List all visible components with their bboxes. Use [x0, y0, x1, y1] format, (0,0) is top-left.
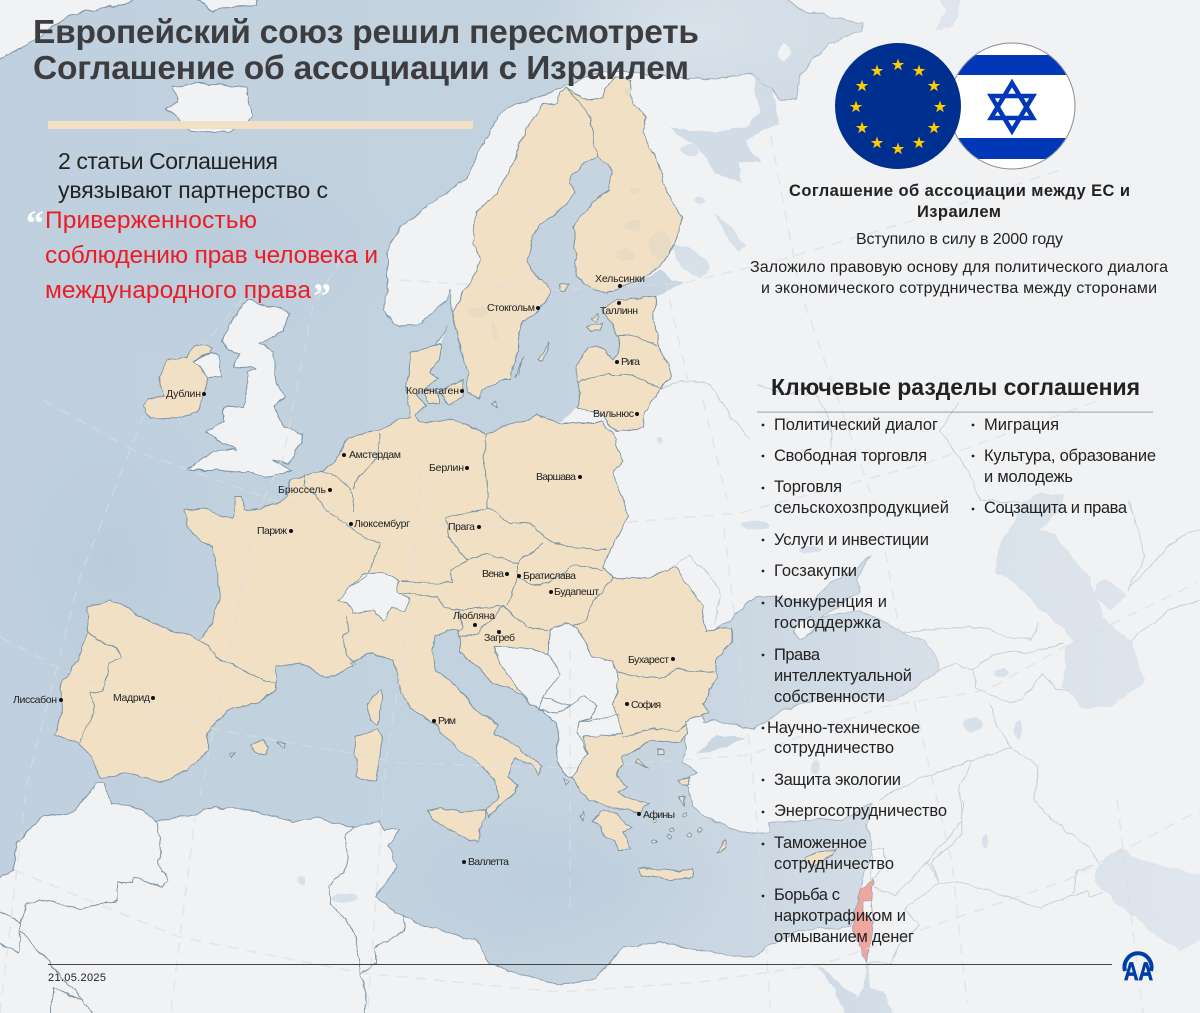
key sections list: column 1: Борьба с	[774, 886, 840, 904]
city names: Мадрид	[113, 692, 150, 704]
baltic states	[577, 297, 671, 433]
key sections list: column 1: Торговля	[774, 478, 842, 496]
lakes	[298, 145, 1022, 903]
key sections list: column 1: сотрудничество	[774, 739, 894, 757]
switzerland	[337, 573, 410, 620]
west bank	[863, 900, 873, 923]
intro text: 2 статьи Соглашения	[58, 148, 278, 174]
kolguev island	[778, 44, 790, 60]
list bullets	[762, 424, 764, 897]
iceland	[167, 83, 252, 133]
agreement details: и экономического сотрудничества между сторонами	[761, 280, 1157, 297]
city names: Брюссель	[278, 484, 327, 496]
western balkans non-EU	[495, 623, 622, 778]
key sections list: column 1: Энергосотрудничество	[774, 802, 947, 820]
africa borders	[0, 822, 404, 1013]
key sections list: column 1: сотрудничество	[774, 855, 894, 873]
sicily	[428, 808, 487, 843]
agreement heading: Израилем	[917, 203, 1001, 221]
ireland	[143, 345, 212, 420]
cyprus	[805, 850, 837, 867]
city names: Берлин	[429, 462, 464, 474]
aegean and baltic islands	[491, 284, 727, 852]
city names: Амстердам	[349, 449, 401, 461]
red quote: Приверженностью	[45, 207, 257, 234]
city names: Будапешт	[554, 586, 599, 598]
key sections list: column 2: Миграция	[984, 416, 1059, 434]
pale sea top right	[933, 0, 960, 30]
column 2 bullets	[972, 424, 974, 510]
svalbard coast	[180, 0, 258, 12]
black sea	[700, 555, 939, 728]
national borders inside EU	[80, 335, 715, 753]
title: Соглашение об ассоциации с Израилем	[33, 50, 689, 87]
key sections list: column 1: Защита экологии	[774, 771, 901, 789]
agreement description	[750, 182, 1168, 297]
key sections list: column 2	[972, 416, 1156, 517]
key sections list: column 1	[762, 416, 949, 946]
key sections list: column 1: господдержка	[774, 614, 882, 632]
flag: European Union	[835, 43, 961, 169]
key sections list: column 1: Госзакупки	[774, 562, 857, 580]
white quotation marks: ”	[313, 276, 331, 316]
sweden	[453, 88, 598, 398]
key sections list: column 1: Свободная торговля	[774, 447, 927, 465]
city names: Любляна	[453, 610, 495, 622]
white quotation marks: “	[26, 203, 44, 243]
title: Европейский союз решил пересмотреть	[33, 14, 699, 51]
city names: Рига	[621, 356, 640, 368]
danish islands	[440, 380, 463, 405]
crete	[638, 868, 692, 880]
persian gulf	[1093, 847, 1200, 950]
city names: Лиссабон	[13, 694, 57, 706]
city names: Бухарест	[628, 654, 669, 666]
key sections heading: Ключевые разделы соглашения	[771, 374, 1140, 400]
city dots	[59, 284, 675, 864]
EU member states	[55, 78, 837, 880]
intro text	[58, 148, 328, 203]
city names: Прага	[448, 521, 475, 533]
balearic islands	[230, 740, 285, 757]
aral sea	[1094, 578, 1127, 610]
intro text: увязывают партнерство с	[58, 177, 328, 203]
lebanon	[870, 848, 885, 880]
northern ireland	[192, 352, 222, 378]
city names: Валлетта	[468, 856, 509, 868]
agreement details: Заложило правовую основу для политического диалога	[750, 259, 1168, 276]
date: 21.05.2025	[48, 972, 106, 984]
logo: Anadolu Agency: AA	[1124, 958, 1153, 986]
greenland coast	[0, 0, 177, 68]
sea shading	[0, 0, 870, 970]
city names: Вена	[482, 568, 504, 580]
key sections list: column 1: Конкуренция и	[774, 593, 887, 611]
flag: Israel	[945, 43, 1080, 169]
city names: Рим	[438, 715, 456, 727]
city names: Варшава	[536, 471, 576, 483]
red sea and suez	[818, 963, 900, 1013]
city names: Афины	[643, 809, 675, 821]
city names: Вильнюс	[593, 408, 634, 420]
key sections list: column 2: Соцзащита и права	[984, 499, 1128, 517]
funen	[425, 390, 438, 403]
EU mainland	[55, 343, 731, 817]
city names: Люксембург	[354, 518, 410, 530]
key sections list: column 2: и молодежь	[984, 468, 1073, 486]
agreement details: Вступило в силу в 2000 году	[856, 231, 1063, 248]
sea of marmara	[696, 735, 746, 753]
agreement heading: Соглашение об ассоциации между ЕС и	[789, 182, 1130, 200]
key sections list: column 1: Научно-техническое	[767, 719, 920, 737]
crimea	[792, 618, 818, 640]
city names: Таллинн	[600, 305, 638, 317]
peloponnese	[592, 810, 632, 850]
israel and palestine highlight	[852, 848, 885, 962]
heading rule	[757, 412, 1153, 413]
footer rule	[48, 964, 1112, 965]
city names: Хельсинки	[595, 273, 645, 285]
caspian sea	[996, 493, 1145, 708]
red quote	[45, 207, 378, 304]
agreement heading	[789, 182, 1130, 221]
agreement details	[750, 231, 1168, 297]
red quote: международного права	[45, 277, 311, 304]
key sections list: column 1: собственности	[774, 688, 885, 706]
key sections list: column 1: Политический диалог	[774, 416, 938, 434]
key sections list: column 1: Права	[774, 646, 821, 664]
city names: Копенгаген	[406, 385, 459, 397]
city names: Братислава	[523, 570, 576, 582]
corsica	[367, 690, 383, 725]
white sea	[669, 75, 780, 183]
tan inland shading	[467, 87, 671, 339]
key sections list: column 1: интеллектуальной	[774, 667, 912, 685]
key sections list: column 1: наркотрафиком и	[774, 907, 906, 925]
city names	[13, 273, 675, 868]
city names: Загреб	[484, 632, 515, 644]
city names: Стокгольм	[487, 302, 535, 314]
finland	[567, 78, 683, 292]
red quote: соблюдению прав человека и	[45, 242, 378, 269]
united kingdom	[187, 300, 302, 478]
sardinia	[355, 730, 382, 782]
baltic sea	[420, 155, 684, 440]
key sections list: column 1: отмыванием денег	[774, 928, 914, 946]
key sections list: column 1: Таможенное	[774, 834, 867, 852]
capital city labels	[13, 273, 675, 868]
white quotation marks	[26, 203, 331, 316]
city names: Дублин	[166, 388, 201, 400]
key sections list: column 1: сельскохозпродукцией	[774, 499, 949, 517]
title	[33, 14, 699, 87]
city names: Париж	[257, 525, 287, 537]
asia borders	[660, 380, 1200, 963]
key sections list: column 2: Культура, образование	[984, 447, 1156, 465]
beige divider bar	[48, 121, 473, 129]
key sections list: column 1: Услуги и инвестиции	[774, 531, 929, 549]
city names: София	[631, 699, 661, 711]
